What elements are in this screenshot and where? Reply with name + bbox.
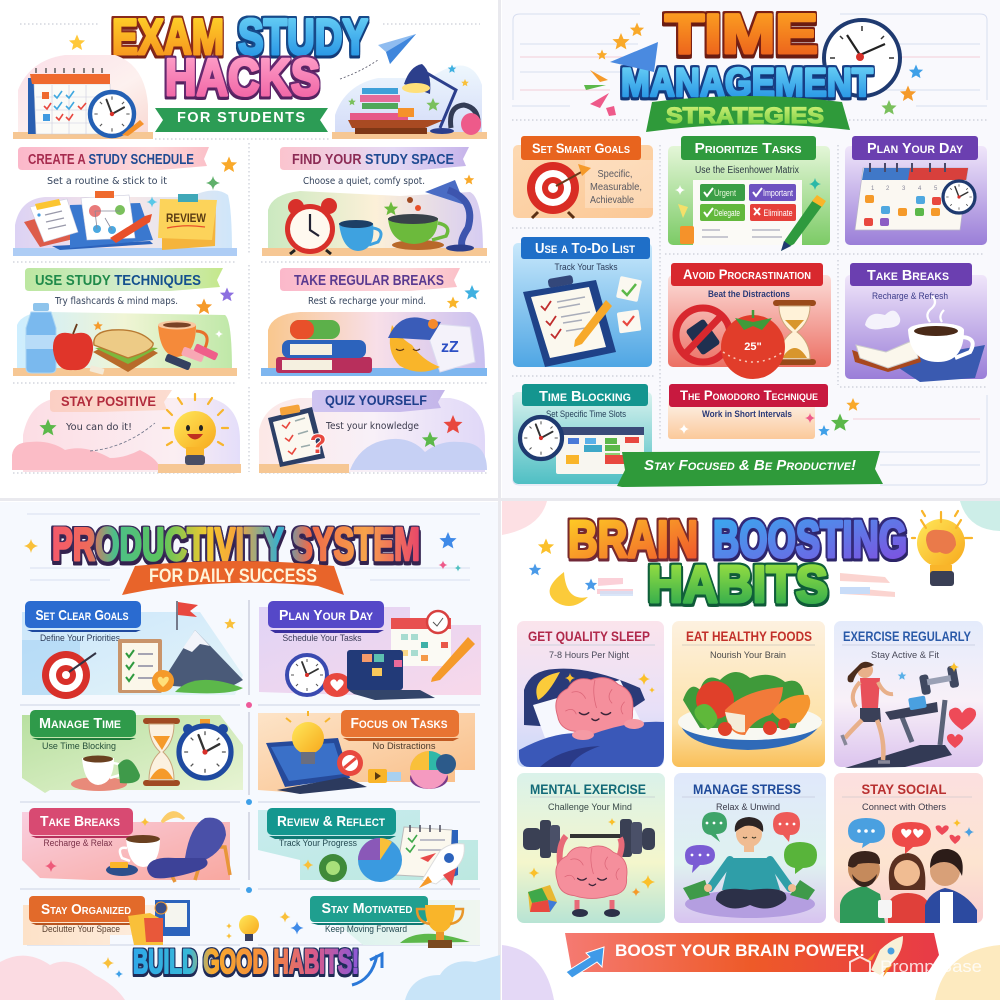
panel: mental exercise xyxy=(517,773,665,923)
panel: take breaks xyxy=(22,808,230,882)
subtitle: You can do it! xyxy=(65,422,132,433)
ribbon xyxy=(29,808,133,838)
arrow xyxy=(566,947,604,978)
ribbon: Prioritize Tasks xyxy=(694,141,802,157)
ribbon: Plan Your Day xyxy=(867,140,964,157)
icon: sleeping moon with pillow: zZ xyxy=(441,339,459,356)
panel: use a to-do list xyxy=(513,237,652,367)
icon: speech bubbles xyxy=(685,812,817,874)
illustration: calendar and clock xyxy=(13,55,153,139)
heading: MENTAL EXERCISE xyxy=(530,782,646,797)
subtitle: Test your knowledge xyxy=(325,421,419,432)
panel: productivity system poster xyxy=(0,514,500,1000)
icon: pencil xyxy=(781,195,826,251)
subtitle: Relax & Unwind xyxy=(716,802,780,812)
panel: stay social xyxy=(834,773,983,923)
icon: tomato timer: 25" xyxy=(744,341,762,353)
icon: dumbbell xyxy=(918,665,960,695)
heading ribbon: CREATE A STUDY SCHEDULE xyxy=(28,152,194,168)
panel: quiz yourself xyxy=(259,390,487,473)
heading: GET QUALITY SLEEP xyxy=(528,629,650,644)
text: No Distractions xyxy=(372,741,436,752)
icon: alarm clock xyxy=(285,198,337,254)
icon: no phone sign xyxy=(676,308,730,362)
heading ribbon xyxy=(280,268,460,291)
panel: avoid procrastination xyxy=(668,263,831,379)
icon: folders and settings xyxy=(128,900,190,945)
banner: strategies: STRATEGIES xyxy=(666,103,824,128)
text: Use Time Blocking xyxy=(42,741,116,752)
text: Schedule Your Tasks xyxy=(282,633,362,644)
text: Keep Moving Forward xyxy=(325,924,407,935)
ribbon xyxy=(671,263,823,286)
panel: set smart goals xyxy=(513,136,653,218)
icon: clipboard xyxy=(118,639,162,693)
icon: pie chart xyxy=(410,751,456,789)
heading: MANAGE STRESS xyxy=(693,782,801,797)
heading: EXERCISE REGULARLY xyxy=(843,629,971,644)
ribbon: Review & Reflect xyxy=(277,813,385,830)
icon: clipboard checklist xyxy=(523,275,616,367)
icon: mug xyxy=(120,835,160,867)
ribbon xyxy=(850,263,972,286)
icon: brain light bulb xyxy=(912,511,972,586)
panel: plan your day xyxy=(259,601,481,700)
icon: open book on mat xyxy=(852,340,985,382)
icon: stopwatch xyxy=(179,719,231,778)
icon: schedule window xyxy=(556,427,644,474)
icon: hourglass xyxy=(143,718,180,786)
banner: boost your brain power xyxy=(565,933,939,978)
title: brain boosting habits: HABITS xyxy=(648,556,828,614)
eisenhower matrix xyxy=(693,180,802,245)
panel: prioritize tasks xyxy=(668,136,830,251)
panel: time blocking xyxy=(513,384,652,484)
text: Achievable xyxy=(590,194,634,206)
panel: plan your day xyxy=(845,136,987,245)
text: Beat the Distractions xyxy=(708,289,790,300)
text: Track Your Progress xyxy=(279,838,357,849)
button: important: Important xyxy=(763,188,793,198)
icon: woman on treadmill xyxy=(842,662,952,768)
ribbon: Set Smart Goals xyxy=(532,140,630,156)
ribbon xyxy=(852,136,978,160)
ribbon: Plan Your Day xyxy=(279,607,374,624)
icon: sandwich xyxy=(93,330,158,372)
ribbon: Time Blocking xyxy=(539,388,631,405)
panel: manage time xyxy=(22,710,243,793)
ribbon: The Pomodoro Technique xyxy=(680,388,818,403)
heading ribbon xyxy=(50,390,172,412)
icon: brain lifting barbell xyxy=(523,818,655,917)
title: exam study hacks: HACKS xyxy=(165,49,320,107)
panel: stay positive xyxy=(12,390,241,473)
button: urgent: Urgent xyxy=(714,188,736,198)
banner: stay focused and be productive xyxy=(617,451,883,487)
icon: heart bubble xyxy=(323,673,351,697)
icon: meditating person xyxy=(683,817,815,918)
ribbon xyxy=(669,384,828,407)
panel: focus on tasks xyxy=(258,710,475,794)
icon: clipboard quiz: ? xyxy=(310,429,326,459)
text: Specific, xyxy=(598,168,632,180)
icon: notes and pencil: REVIEW xyxy=(166,213,206,225)
icon: hearts xyxy=(898,662,976,748)
icon: clock xyxy=(520,417,562,459)
icon: coffee cup on saucer xyxy=(71,756,140,791)
ribbon: Stay Organized xyxy=(41,902,131,918)
icon: target xyxy=(527,162,591,218)
panel: use study techniques xyxy=(13,268,237,376)
icon: cloud xyxy=(865,311,900,329)
text: Set Specific Time Slots xyxy=(546,409,626,420)
icon: check cards xyxy=(616,276,642,333)
ribbon: Focus on Tasks xyxy=(350,715,448,732)
text: Track Your Tasks xyxy=(554,262,618,273)
arrow: dashed xyxy=(90,423,155,451)
icon: play folder xyxy=(368,769,401,783)
panel: exam study hacks poster xyxy=(12,9,490,473)
panel: manage stress xyxy=(674,773,826,923)
subtitle: Try flashcards & mind maps. xyxy=(54,296,178,307)
clouds xyxy=(0,955,500,1000)
icon: stacked books xyxy=(276,320,372,373)
icon: book on plate xyxy=(106,862,138,876)
icon: coffee cup xyxy=(908,296,973,362)
ribbon: Stay Motivated xyxy=(322,901,412,917)
icon: light bulb xyxy=(286,711,330,764)
icon: lounge chair xyxy=(147,818,230,882)
ribbon xyxy=(29,896,145,925)
heading: STAY SOCIAL xyxy=(862,782,946,797)
icon: stars xyxy=(93,288,234,338)
banner: strategies xyxy=(646,96,850,132)
panel: create a study schedule xyxy=(13,147,237,256)
heading ribbon: TAKE REGULAR BREAKS xyxy=(294,273,444,289)
title: exam study hacks xyxy=(112,9,368,107)
icon: star xyxy=(69,34,85,50)
title: exam study hacks: EXAM xyxy=(112,9,224,65)
icon: rocket xyxy=(419,844,464,888)
icon: rocket xyxy=(865,936,903,977)
banner: boost your brain power: BOOST YOUR BRAIN POWER! xyxy=(615,941,865,960)
subtitle: 7-8 Hours Per Night xyxy=(549,650,629,660)
subtitle: Challenge Your Mind xyxy=(548,802,632,812)
icon: small light bulb and stars xyxy=(102,912,304,978)
text: Work in Short Intervals xyxy=(702,409,792,420)
speed stripes xyxy=(597,573,895,597)
icon: erasers and flashcards xyxy=(89,343,219,375)
panel: take regular breaks xyxy=(261,268,487,376)
icon: sleeping brain in bed xyxy=(519,669,664,767)
panel: get quality sleep xyxy=(517,621,664,767)
heading ribbon: STAY POSITIVE xyxy=(61,394,156,409)
ribbon xyxy=(341,710,459,741)
heading ribbon xyxy=(312,390,445,412)
ribbon xyxy=(25,601,141,632)
decorative stars xyxy=(24,532,462,572)
icon: moon and stars xyxy=(529,538,597,606)
text: Use the Eisenhower Matrix xyxy=(695,165,799,176)
icon: clipboard quiz xyxy=(268,404,326,467)
title: management: MANAGEMENT xyxy=(621,61,873,105)
ribbon: Avoid Procrastination xyxy=(683,266,811,282)
icon: notebook xyxy=(396,825,458,878)
icon: blue cup xyxy=(339,220,381,251)
ribbon xyxy=(30,710,136,740)
ribbon xyxy=(268,601,384,633)
icon: stars xyxy=(422,415,462,447)
banner: for students xyxy=(155,108,328,132)
icon: no sign xyxy=(337,750,363,776)
banner: for daily success: FOR DAILY SUCCESS xyxy=(149,566,317,587)
title: exam study hacks: STUDY xyxy=(238,9,368,65)
icon: green star xyxy=(39,419,57,435)
icon: calendar: 1 xyxy=(871,186,875,192)
icon: sleeping moon with pillow xyxy=(388,285,480,372)
title: productivity system: PRODUCTIVITY SYSTEM xyxy=(52,518,420,570)
subtitle: Rest & recharge your mind. xyxy=(308,296,426,307)
closing title: build good habits: BUILD GOOD HABITS! xyxy=(133,943,359,981)
icon: stars xyxy=(384,174,474,215)
icon: hourglass xyxy=(773,300,816,365)
heading ribbon xyxy=(280,147,469,170)
panel: time management poster xyxy=(512,2,987,487)
icon: pencil xyxy=(431,637,475,682)
icon: stars xyxy=(146,156,237,208)
panel: exercise regularly xyxy=(834,621,983,768)
panel: the pomodoro technique xyxy=(668,384,860,439)
icon: apple xyxy=(53,324,93,370)
button: delegate: Delegate xyxy=(714,208,740,218)
ribbon: Take Breaks xyxy=(40,813,120,830)
title: brain boosting habits: BRAIN xyxy=(568,511,698,569)
ribbon xyxy=(310,896,428,925)
text xyxy=(590,168,642,206)
icon: clock xyxy=(943,181,975,213)
icon: mountain with flag xyxy=(160,601,243,693)
panel: find your study space xyxy=(262,147,487,256)
text: Recharge & Refresh xyxy=(872,291,948,302)
icon: laptop xyxy=(347,650,435,700)
icon: three friends xyxy=(840,849,977,923)
icon: orange mug xyxy=(158,320,207,357)
ribbon xyxy=(681,136,816,160)
ribbon: Manage Time xyxy=(39,715,121,732)
title: brain boosting habits xyxy=(568,511,907,614)
ribbon: Take Breaks xyxy=(867,267,949,284)
icon: notes and pencil xyxy=(24,191,217,250)
icon: clock xyxy=(287,655,327,695)
subtitle: Connect with Others xyxy=(862,802,947,812)
icon: smiling bulb xyxy=(163,394,228,465)
icon: gear with heart xyxy=(302,854,347,882)
watermark: PromptBase xyxy=(880,957,982,976)
icon: calendar: 2 xyxy=(886,186,890,192)
panel: set clear goals xyxy=(22,601,243,699)
title: time: TIME xyxy=(665,2,818,65)
heading ribbon xyxy=(18,147,209,170)
icon: target xyxy=(42,651,96,699)
icon: calendar: 5 xyxy=(934,186,938,192)
icon: healthy plate xyxy=(678,672,822,750)
subtitle: Nourish Your Brain xyxy=(710,650,786,660)
subtitle: Choose a quiet, comfy spot. xyxy=(303,176,425,187)
icon: stars xyxy=(679,398,860,436)
panel: brain boosting habits poster xyxy=(502,501,1000,1000)
decorative shapes and stars xyxy=(584,22,923,116)
icon: wall clock xyxy=(824,20,900,96)
button: eliminate: Eliminate xyxy=(764,208,792,218)
text: Declutter Your Space xyxy=(42,924,120,935)
watermark xyxy=(850,957,982,978)
ribbon: Use a To-Do List xyxy=(535,240,635,257)
subtitle: Set a routine & stick to it xyxy=(47,176,167,187)
panel: stay organized xyxy=(23,896,190,945)
illustration: books on desk with lamp xyxy=(332,64,487,139)
icon: paper airplane xyxy=(340,34,416,79)
icon: stars and sun xyxy=(45,813,184,872)
icon: calendar: 4 xyxy=(918,186,922,192)
heading ribbon: QUIZ YOURSELF xyxy=(325,393,427,408)
panel: review and reflect xyxy=(258,808,478,888)
text: Recharge & Relax xyxy=(44,838,113,849)
icon: trophy xyxy=(400,905,470,948)
arrow: upward xyxy=(352,954,382,985)
banner: stay focused and be productive: Stay Focused & Be Productive! xyxy=(644,457,856,474)
banner: for daily success xyxy=(122,561,344,595)
icon: calendar: 3 xyxy=(902,186,906,192)
icon: water bottle xyxy=(26,303,56,373)
icon: desk lamp xyxy=(425,180,474,252)
panel: stay motivated xyxy=(310,896,480,948)
decorative shapes xyxy=(675,178,821,244)
heading ribbon: FIND YOUR STUDY SPACE xyxy=(292,152,454,168)
text: Measurable, xyxy=(590,181,642,193)
icon: laptop xyxy=(266,738,367,794)
icon: pie chart xyxy=(358,838,402,882)
panel: take breaks xyxy=(845,263,987,382)
heading: EAT HEALTHY FOODS xyxy=(686,629,812,644)
title: brain boosting habits: BOOSTING xyxy=(713,511,907,569)
icon: tomato timer xyxy=(721,310,785,379)
ribbon: Set Clear Goals xyxy=(36,607,128,624)
heading ribbon xyxy=(25,268,223,291)
icon: heart coin xyxy=(152,618,236,692)
corner blobs xyxy=(502,501,1000,1000)
ribbon xyxy=(267,808,396,839)
icon: calendar xyxy=(855,163,968,230)
heading ribbon: USE STUDY TECHNIQUES xyxy=(35,273,201,289)
icon: calendar xyxy=(391,611,451,666)
icon: chat bubbles xyxy=(848,818,974,854)
banner: for students: FOR STUDENTS xyxy=(177,110,305,126)
text: Define Your Priorities xyxy=(40,633,120,644)
icon: green cup xyxy=(388,214,448,250)
panel: eat healthy foods xyxy=(672,621,825,767)
subtitle: Stay Active & Fit xyxy=(871,650,940,660)
